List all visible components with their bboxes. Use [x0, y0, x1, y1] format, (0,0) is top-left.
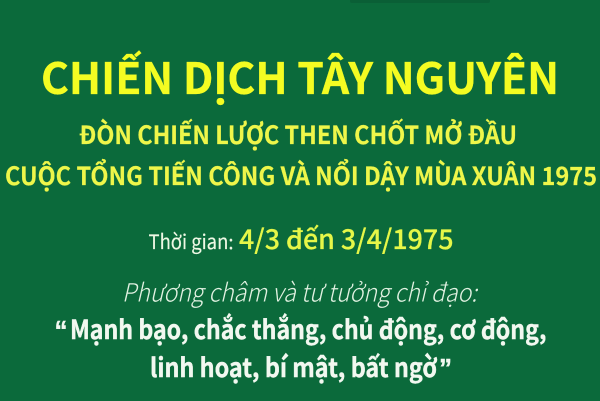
guideline quote line 2: ”: [439, 353, 452, 383]
title: CHIẾN DỊCH TÂY NGUYÊN: [41, 45, 559, 107]
guideline quote line 1: Mạnh bạo, chắc thắng, chủ động, cơ động,: [70, 310, 546, 347]
guideline quote line 1: “: [54, 315, 68, 345]
time value: 4/3 đến 3/4/1975: [239, 218, 454, 257]
guideline quote line 2: linh hoạt, bí mật, bất ngờ: [150, 348, 438, 385]
time label: Thời gian:: [148, 226, 234, 255]
subtitle line 1: ĐÒN CHIẾN LƯỢC THEN CHỐT MỞ ĐẦU: [79, 116, 517, 152]
dark shape at top edge: [350, 0, 490, 3]
guideline label: Phương châm và tư tưởng chỉ đạo:: [122, 274, 479, 310]
